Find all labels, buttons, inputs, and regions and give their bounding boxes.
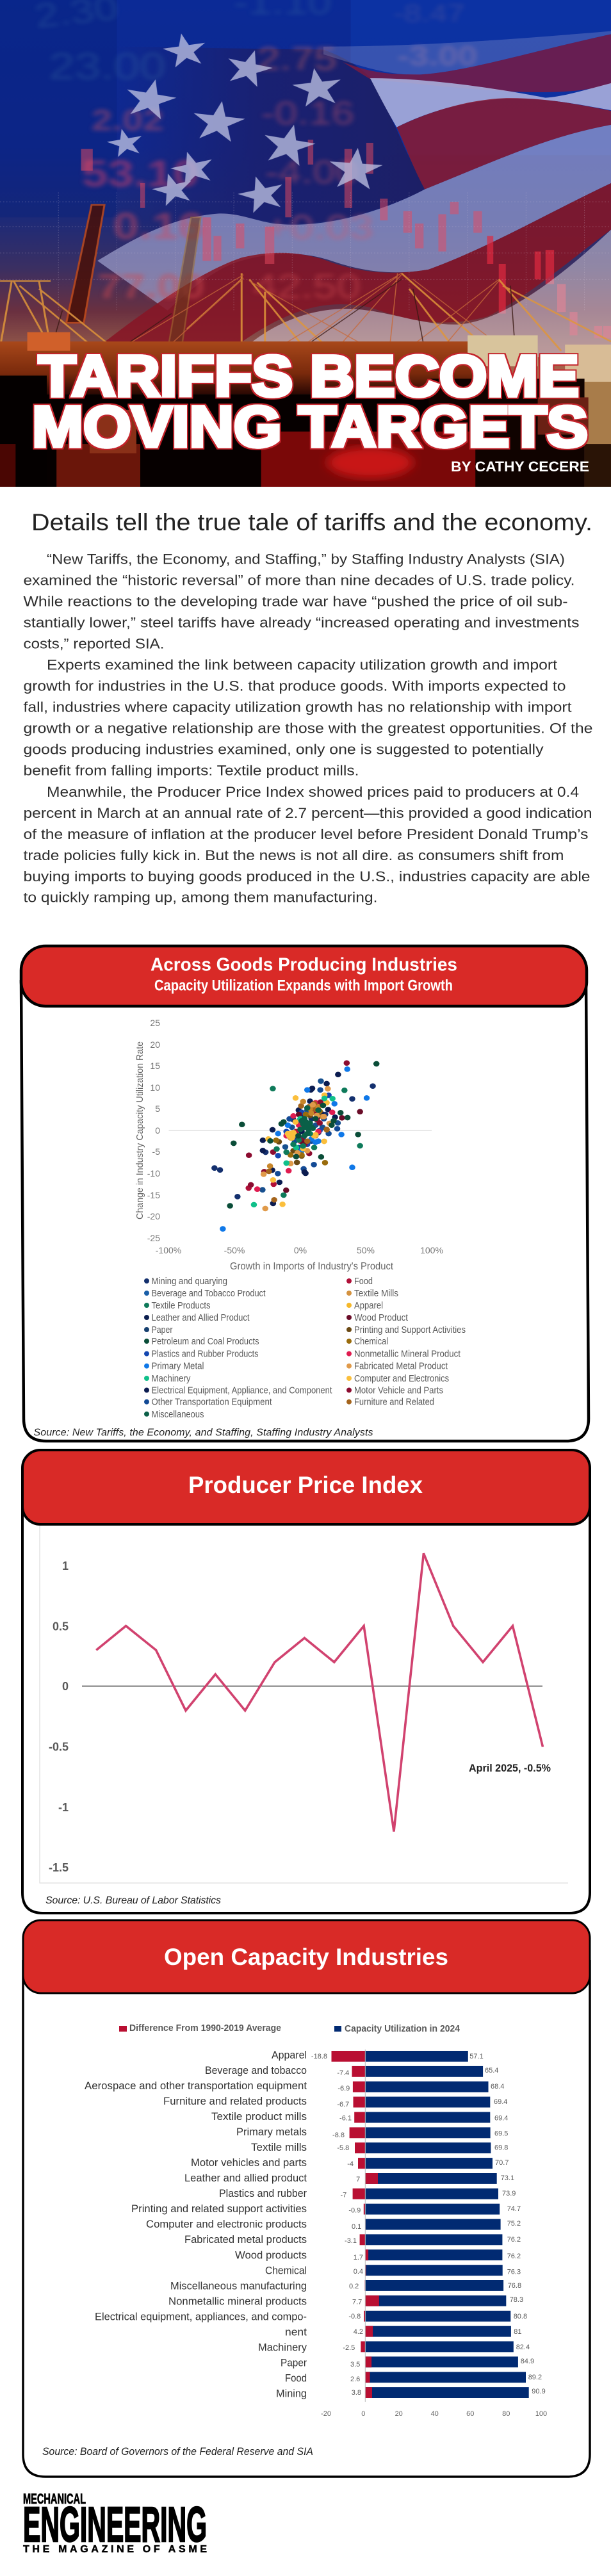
difference value labels: -4 [347, 2160, 354, 2168]
capacity value labels: 89.2 [528, 2374, 542, 2381]
scatter legend: Plastics and Rubber Products [151, 1349, 259, 1360]
scatter legend: Chemical [354, 1337, 388, 1347]
difference value labels: -7.4 [337, 2069, 349, 2077]
hero image banner: -4.00 [265, 154, 358, 190]
scatter legend: Other Transportation Equipment [151, 1398, 272, 1408]
panel header: across goods producing industries: Across Goods Producing Industries [151, 954, 457, 975]
scatter legend: Primary Metal [151, 1362, 204, 1372]
panel header: open capacity industries: Open Capacity Industries [164, 1944, 448, 1970]
article body text: buying imports to buying goods produced in the U.S., industries capacity are able [23, 868, 591, 884]
panel: open capacity industries bar chart [23, 1920, 590, 2477]
scatter legend: Leather and Allied Product [151, 1313, 250, 1323]
capacity value labels: 73.9 [502, 2190, 516, 2197]
article body text: Experts examined the link between capacity utilization growth and import [47, 657, 558, 673]
capacity value labels: 68.4 [491, 2083, 504, 2091]
capacity value labels: 80.8 [514, 2313, 527, 2320]
scatter legend: Mining and quarying [151, 1276, 227, 1287]
bar chart category labels: Computer and electronic products [146, 2219, 307, 2230]
difference value labels: 4.2 [354, 2328, 363, 2336]
publication logo: MECHANICAL [23, 2491, 86, 2507]
difference value labels: 2.6 [350, 2376, 360, 2383]
article body text: growth for industries in the U.S. that produce goods. With imports expected to [23, 678, 566, 694]
scatter chart axes: -15 [147, 1190, 160, 1200]
difference value labels: -5.8 [337, 2144, 349, 2152]
article heading: Details tell the true tale of tariffs and the economy. [31, 509, 592, 535]
capacity value labels: 82.4 [516, 2344, 530, 2351]
difference from average bars [332, 2051, 379, 2398]
scatter chart axes: 0% [294, 1245, 307, 1255]
callout: april 2025: April 2025, -0.5% [469, 1762, 551, 1774]
article body text: costs,” reported SIA. [23, 636, 164, 652]
panel header: across goods producing industries: Capacity Utilization Expands with Import Growth [154, 977, 453, 994]
bar chart category labels: Aerospace and other transportation equipment [85, 2080, 307, 2092]
bar chart category labels: Printing and related support activities [131, 2203, 307, 2215]
scatter legend: Paper [151, 1325, 173, 1335]
bar chart category labels: Leather and allied product [184, 2172, 307, 2184]
bar chart category labels [85, 2050, 307, 2400]
scatter legend: Nonmetallic Mineral Product [354, 1349, 460, 1360]
bar chart category labels: Primary metals [236, 2126, 307, 2138]
bar chart category labels: Mining [276, 2388, 307, 2400]
difference value labels: 0.4 [354, 2268, 363, 2276]
scatter chart axes: -20 [147, 1211, 160, 1221]
bar chart category labels: Chemical [265, 2265, 307, 2276]
difference value labels: -2.5 [343, 2344, 355, 2352]
difference value labels: 7.7 [352, 2298, 362, 2306]
capacity value labels: 76.2 [507, 2253, 521, 2260]
capacity value labels: 81 [514, 2328, 522, 2336]
bar chart category labels: Furniture and related products [163, 2096, 307, 2107]
bar chart legend: Difference From 1990-2019 Average [129, 2023, 281, 2034]
capacity value labels: 75.2 [507, 2220, 521, 2228]
scatter chart axes: -100% [156, 1245, 181, 1255]
bar chart category labels: Wood products [235, 2249, 307, 2261]
hero image banner: 2.75 [257, 41, 337, 77]
scatter legend: Petroleum and Coal Products [151, 1337, 259, 1347]
capacity value labels: 84.9 [521, 2358, 534, 2365]
scatter legend: Textile Mills [354, 1289, 398, 1299]
hero decorative stars group [104, 31, 384, 215]
article body text: goods producing industries examined, only one is suggested to potentially [23, 742, 544, 758]
difference value labels: -7 [341, 2192, 346, 2199]
scatter legend: Apparel [354, 1301, 383, 1311]
capacity value labels: 57.1 [469, 2053, 484, 2060]
scatter chart axes: 10 [150, 1082, 160, 1093]
panel header: producer price index: Producer Price Index [188, 1472, 423, 1498]
scatter chart axes: 0 [155, 1125, 160, 1136]
difference value labels: 0.2 [349, 2283, 359, 2290]
difference value labels: -18.8 [311, 2053, 327, 2060]
scatter legend: Textile Products [151, 1301, 210, 1311]
hero image banner: +0.03 [265, 208, 373, 247]
capacity value labels: 73.1 [501, 2174, 514, 2182]
line chart source note: Source: U.S. Bureau of Labor Statistics [45, 1895, 221, 1906]
article body text [23, 551, 593, 906]
line chart axes: -1 [58, 1801, 69, 1814]
difference value labels: -3.1 [345, 2237, 357, 2245]
line chart axes: 0.5 [53, 1620, 69, 1633]
bar chart category labels: Plastics and rubber [219, 2188, 307, 2199]
line chart axes: -1.5 [49, 1861, 69, 1874]
hero image banner: 0.16 [113, 205, 204, 247]
hero image banner: 23.00 [49, 45, 166, 87]
publication logo: ENGINEERING [23, 2497, 207, 2552]
capacity value labels: 65.4 [485, 2067, 498, 2075]
difference value labels: 0.1 [352, 2223, 361, 2231]
bar chart category labels: Beverage and tobacco [205, 2065, 307, 2076]
scatter chart axes: 15 [150, 1061, 160, 1071]
scatter chart axes: -50% [224, 1245, 245, 1255]
bar chart category labels: Textile mills [251, 2142, 307, 2153]
bar chart category labels: Motor vehicles and parts [191, 2157, 307, 2169]
difference value labels: 7 [356, 2176, 360, 2183]
difference value labels: -6.7 [337, 2101, 349, 2108]
scatter legend: Wood Product [354, 1313, 408, 1323]
hero image banner: -0.16 [261, 95, 354, 131]
bar chart category labels: Electrical equipment, appliances, and compo- [95, 2311, 307, 2322]
bar chart x axis labels: 40 [431, 2410, 439, 2418]
line chart axes: 0 [62, 1680, 69, 1693]
difference value labels: 3.8 [352, 2389, 361, 2397]
line chart axes: -0.5 [49, 1741, 69, 1754]
scatter chart axes: 50% [357, 1245, 375, 1255]
panel header: producer price index [22, 1450, 590, 1524]
port cranes are part of hero [0, 205, 611, 357]
scatter legend: Printing and Support Activities [354, 1325, 466, 1335]
bar chart category labels: Food [285, 2372, 307, 2384]
panel header: across goods producing industries [21, 946, 587, 1006]
article body text: trade policies fully kick in. But the news is not all dire. as consumers shift from [23, 847, 564, 863]
hero image banner: 77.00 [97, 267, 205, 306]
capacity value labels: 69.4 [494, 2115, 508, 2123]
capacity utilization bars [365, 2051, 529, 2398]
bar chart category labels: Nonmetallic mineral products [168, 2295, 307, 2307]
scatter chart axes: -10 [147, 1168, 160, 1178]
article body text: Meanwhile, the Producer Price Index showed prices paid to producers at 0.4 [47, 784, 579, 800]
difference value labels: -8.8 [332, 2132, 345, 2139]
hero image banner [0, 0, 611, 487]
hero image banner: 42.50 [253, 267, 361, 306]
difference value labels: -6.9 [338, 2085, 350, 2092]
article body text: While reactions to the developing trade war have “pushed the price of oil sub- [23, 593, 568, 610]
main title [32, 345, 588, 459]
scatter legend: Computer and Electronics [354, 1374, 449, 1384]
scatter chart axes: -5 [152, 1146, 160, 1157]
bar chart category labels: nent [285, 2326, 307, 2338]
bar chart x axis labels [321, 2410, 547, 2418]
capacity value labels [469, 2053, 546, 2395]
difference value labels: -0.8 [348, 2313, 361, 2320]
bar chart category labels: Apparel [272, 2050, 307, 2061]
difference value labels: 1.7 [354, 2254, 363, 2262]
article body text: percent in March at an annual rate of 2.7 percent—this provided a good indication [23, 805, 592, 821]
bar chart legend [119, 2023, 460, 2034]
panel: goods producing industries scatter chart [21, 946, 589, 1441]
capacity value labels: 78.3 [510, 2296, 523, 2304]
publication logo [23, 2491, 207, 2555]
hero image banner: -8.47 [393, 0, 464, 28]
bar chart category labels: Machinery [258, 2342, 307, 2353]
scatter chart axes [135, 1018, 443, 1272]
capacity value labels: 74.7 [507, 2205, 521, 2213]
publication logo: THE MAGAZINE OF ASME [23, 2544, 207, 2555]
panel: producer price index line chart [22, 1450, 590, 1913]
scatter source note: Source: New Tariffs, the Economy, and Staffing, Staffing Industry Analysts [33, 1428, 373, 1439]
canton is part of flag [117, 47, 425, 257]
article body text: examined the “historic reversal” of more than nine decades of U.S. trade policy. [23, 573, 575, 588]
difference value labels: 3.5 [350, 2361, 360, 2368]
scatter chart axes: 20 [150, 1039, 160, 1050]
line series [96, 1553, 543, 1832]
bar chart x axis labels: 100 [535, 2410, 547, 2418]
capacity value labels: 76.8 [508, 2282, 521, 2290]
bar chart x axis labels: 0 [361, 2410, 365, 2418]
scatter legend [144, 1276, 466, 1420]
scatter chart axes: -25 [147, 1233, 160, 1243]
scatter legend: Machinery [151, 1374, 191, 1384]
bar chart source note: Source: Board of Governors of the Federal Reserve and SIA [42, 2445, 313, 2458]
panel header: open capacity industries [23, 1920, 590, 1993]
article body text: benefit from falling imports: Textile product mills. [23, 763, 359, 779]
scatter legend: Electrical Equipment, Appliance, and Component [151, 1386, 332, 1396]
bar chart x axis labels: 80 [502, 2410, 510, 2418]
scatter legend: Furniture and Related [354, 1398, 434, 1408]
hero image banner: -3.00 [398, 40, 477, 71]
capacity value labels: 76.2 [507, 2236, 521, 2244]
scatter chart axes: 25 [150, 1018, 160, 1028]
bar chart x axis labels: 20 [395, 2410, 403, 2418]
main title: MOVING TARGETS [32, 395, 588, 459]
article body text: of the measure of inflation at the producer level before President Donald Trump’s [23, 826, 588, 842]
hero image banner: 2.02 [92, 104, 163, 137]
article body text: stantially lower,” steel tariffs have already “increased operating and investments [23, 615, 579, 631]
article body text: growth or a negative relationship are those with the greatest opportunities. Of the [23, 721, 593, 737]
bar chart category labels: Fabricated metal products [184, 2234, 307, 2246]
scatter chart axes: Change in Industry Capacity Utilization Rate [135, 1041, 145, 1219]
scatter legend: Fabricated Metal Product [354, 1362, 448, 1372]
scatter chart axes: 100% [420, 1245, 443, 1255]
article body text: fall, industries where capacity utilization growth has no relationship with import [23, 699, 572, 715]
capacity value labels: 70.7 [495, 2159, 509, 2167]
difference value labels [311, 2053, 363, 2397]
bar chart x axis labels: -20 [321, 2410, 331, 2418]
difference value labels: -6.1 [339, 2115, 352, 2123]
scatter legend: Beverage and Tobacco Product [151, 1289, 265, 1299]
capacity value labels: 69.4 [494, 2098, 507, 2106]
capacity value labels: 69.8 [494, 2144, 508, 2152]
capacity value labels: 76.3 [507, 2269, 521, 2276]
article body text: “New Tariffs, the Economy, and Staffing,” by Staffing Industry Analysts (SIA) [47, 551, 565, 567]
line chart axes [40, 1526, 568, 1883]
scatter legend: Food [354, 1276, 373, 1287]
bar chart category labels: Paper [281, 2357, 307, 2368]
line chart axes: 1 [62, 1560, 69, 1572]
article body text: to quickly ramping up, among them manufacturing. [23, 889, 378, 906]
bar chart x axis labels: 60 [466, 2410, 474, 2418]
scatter chart axes: 5 [155, 1104, 160, 1114]
difference value labels: -0.9 [348, 2207, 361, 2215]
byline: BY CATHY CECERE [451, 459, 589, 475]
bar chart category labels: Miscellaneous manufacturing [170, 2280, 307, 2292]
bar chart legend: Capacity Utilization in 2024 [345, 2023, 460, 2034]
scatter points [211, 1060, 379, 1232]
scatter legend: Miscellaneous [151, 1410, 204, 1420]
scatter chart axes: Growth in Imports of Industry's Product [230, 1261, 394, 1272]
capacity value labels: 69.5 [494, 2130, 508, 2138]
hero image banner: 53.10 [82, 152, 199, 194]
bar chart category labels: Textile product mills [211, 2111, 307, 2123]
capacity value labels: 90.9 [532, 2388, 546, 2395]
main title: TARIFFS BECOME [38, 345, 579, 409]
scatter legend: Motor Vehicle and Parts [354, 1386, 443, 1396]
